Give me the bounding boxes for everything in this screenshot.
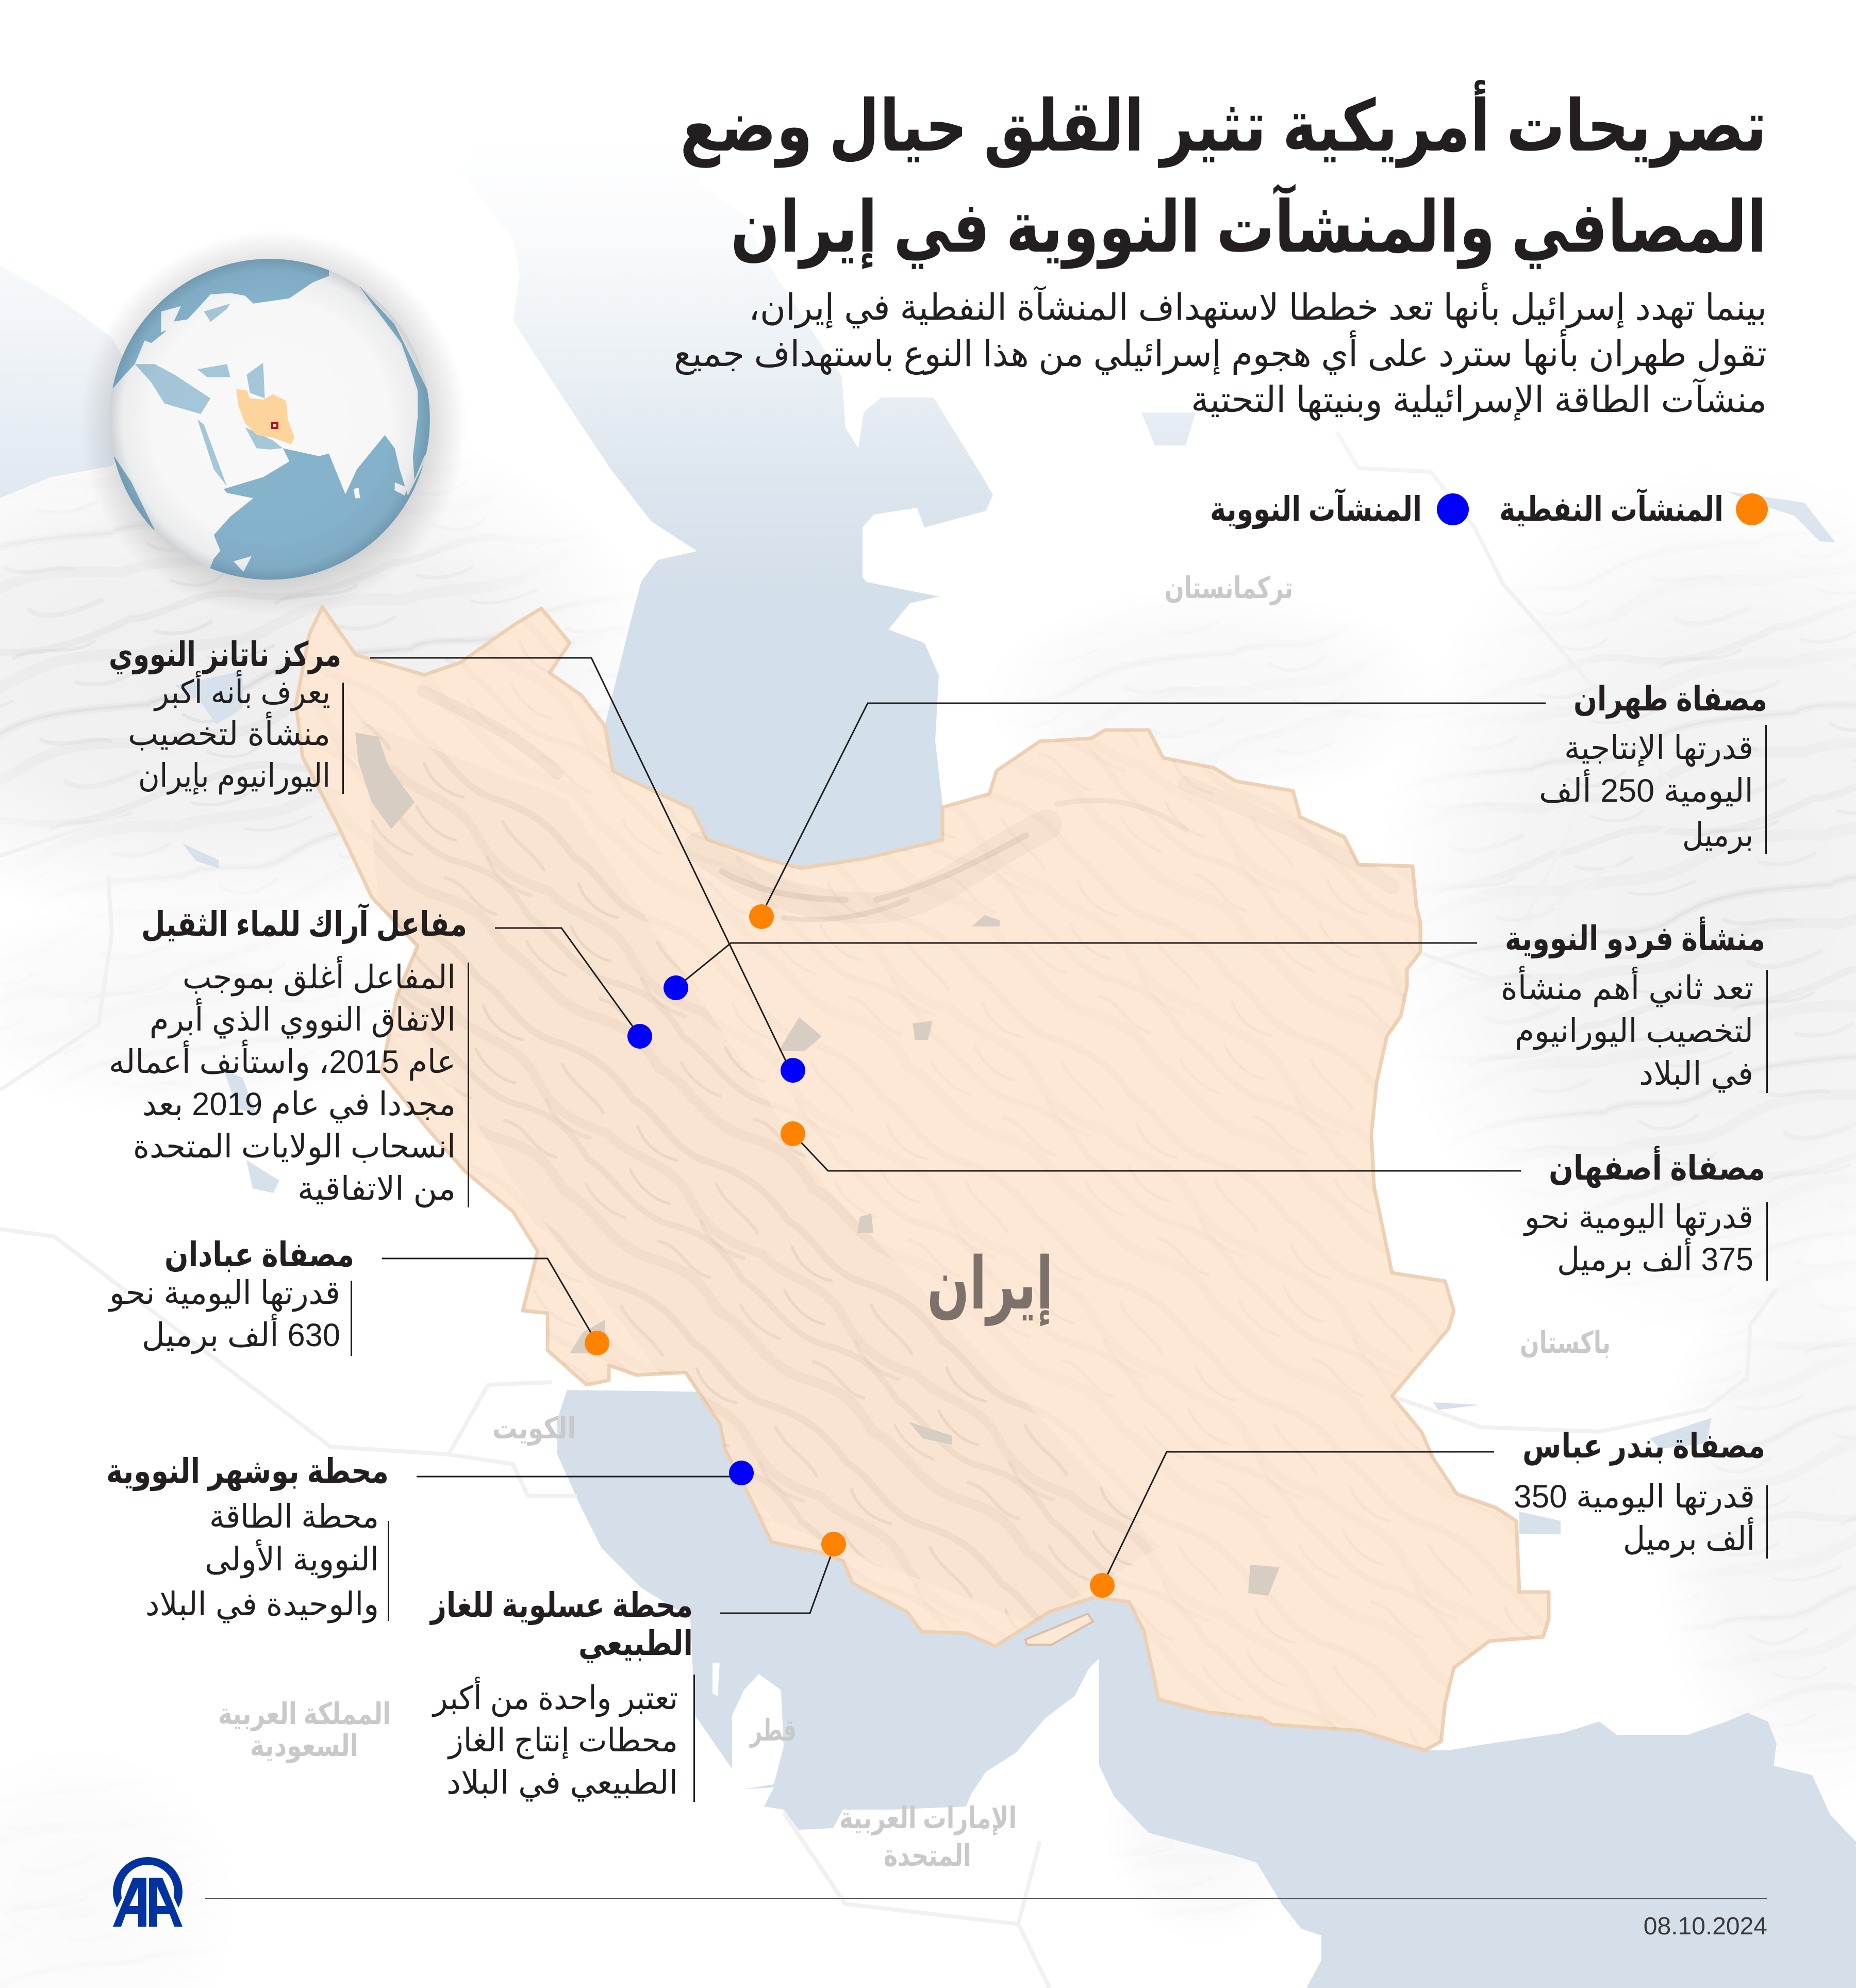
water: Persian Gulf and Sea of Oman bbox=[557, 1390, 1856, 1988]
panel: Asaluyeh: الطبيعي bbox=[578, 1624, 693, 1663]
salt lakes inside Iran bbox=[355, 733, 1280, 1596]
panel: Asaluyeh bbox=[429, 1586, 695, 1802]
subtitle paragraph: بينما تهدد إسرائيل بأنها تعد خططا لاستهداف المنشآة النفطية في إيران، bbox=[749, 283, 1767, 329]
panel: Asaluyeh: محطة عسلوية للغاز bbox=[429, 1586, 693, 1626]
legend bbox=[1210, 488, 1768, 529]
footer rule bbox=[205, 1898, 1767, 1899]
panel: Fordow bbox=[1501, 916, 1768, 1093]
panel: Natanz: مركز ناتانز النووي bbox=[109, 635, 341, 675]
panel: Abadan bbox=[108, 1235, 354, 1356]
panel: Arak: مجددا في عام 2019 بعد bbox=[142, 1086, 456, 1123]
panel: Bushehr: النووية الأولى bbox=[205, 1539, 379, 1579]
relief: Alborz ridge bbox=[423, 691, 1392, 920]
top fade bbox=[0, 0, 1856, 593]
island: Qeshm bbox=[1025, 1614, 1093, 1645]
panel: Tehran refinery: مصفاة طهران bbox=[1573, 680, 1767, 719]
panel: Bushehr: والوحيدة في البلاد bbox=[145, 1586, 379, 1623]
panel: Tehran refinery bbox=[1539, 680, 1767, 854]
panel: Bandar Abbas refinery: قدرتها اليومية 350 bbox=[1514, 1479, 1755, 1516]
title bbox=[680, 80, 1767, 269]
panel: Arak: المفاعل أغلق بموجب bbox=[183, 956, 456, 997]
logo: AA bbox=[113, 1857, 183, 1927]
country labels: قطر bbox=[749, 1714, 797, 1748]
marker: Fordow bbox=[664, 975, 688, 1000]
panel: Bandar Abbas refinery: مصفاة بندر عباس bbox=[1522, 1427, 1765, 1466]
country labels: السعودية bbox=[250, 1729, 358, 1764]
marker: Asaluyeh bbox=[821, 1532, 846, 1556]
land: Qatar and Bahrain bbox=[712, 1663, 784, 1789]
panel: Fordow: تعد ثاني أهم منشأة bbox=[1501, 966, 1753, 1007]
panel: Tehran refinery: برميل bbox=[1682, 817, 1753, 854]
panel: Abadan: 630 ألف برميل bbox=[142, 1314, 340, 1354]
panel: Bushehr: محطة بوشهر النووية bbox=[106, 1452, 389, 1492]
country labels bbox=[218, 571, 1611, 1873]
relief: Zagros band bbox=[399, 872, 1036, 1496]
water: Caspian Sea bbox=[460, 103, 993, 902]
panel: Natanz bbox=[109, 635, 344, 795]
panel: Arak: الاتفاق النووي الذي أبرم bbox=[150, 998, 456, 1039]
map: Iran bbox=[284, 593, 1572, 1758]
subtitle paragraph: تقول طهران بأنها سترد على أي هجوم إسرائيلي من هذا النوع باستهداف جميع bbox=[674, 329, 1767, 375]
date: 08.10.2024 bbox=[1644, 1913, 1767, 1940]
panel: Isfahan refinery bbox=[1523, 1146, 1768, 1281]
legend: oil facilities: المنشآت النفطية bbox=[1499, 488, 1724, 528]
marker: Arak bbox=[627, 1024, 652, 1049]
panel: Abadan: قدرتها اليومية نحو bbox=[108, 1275, 340, 1312]
marker: Natanz bbox=[781, 1058, 805, 1083]
marker: Abadan refinery bbox=[585, 1331, 609, 1355]
panel: Tehran refinery: قدرتها الإنتاجية bbox=[1564, 730, 1753, 767]
water: Black Sea bbox=[0, 265, 155, 498]
panel: Fordow: لتخصيب اليورانيوم bbox=[1515, 1013, 1753, 1050]
panel: Arak: مفاعل آراك للماء الثقيل bbox=[141, 903, 467, 944]
country labels: تركمانستان bbox=[1165, 571, 1293, 606]
panel: Isfahan refinery: مصفاة أصفهان bbox=[1549, 1146, 1765, 1188]
panel: Isfahan refinery: 375 ألف برميل bbox=[1557, 1238, 1753, 1279]
panel: Natanz: اليورانيوم بإيران bbox=[138, 758, 330, 795]
panel: Arak: من الاتفاقية bbox=[297, 1171, 456, 1208]
panel: Asaluyeh: تعتبر واحدة من أكبر bbox=[432, 1677, 678, 1717]
country labels: المتحدة bbox=[884, 1839, 971, 1873]
panel: Abadan: مصفاة عبادان bbox=[164, 1235, 354, 1273]
country labels: الكويت bbox=[492, 1412, 576, 1446]
country borders bbox=[0, 432, 1777, 1988]
marker: Isfahan refinery bbox=[781, 1121, 805, 1146]
country labels: الإمارات العربية bbox=[839, 1801, 1017, 1836]
panel: Tehran refinery: اليومية 250 ألف bbox=[1539, 769, 1753, 810]
subtitle paragraph bbox=[674, 283, 1767, 421]
panel: Bushehr: محطة الطاقة bbox=[209, 1499, 379, 1535]
panel: Isfahan refinery: قدرتها اليومية نحو bbox=[1523, 1199, 1753, 1236]
panel: Fordow: في البلاد bbox=[1639, 1056, 1753, 1093]
country labels: المملكة العربية bbox=[218, 1697, 391, 1732]
marker: Bushehr bbox=[729, 1461, 754, 1485]
panel: Asaluyeh: محطات إنتاج الغاز bbox=[447, 1722, 678, 1760]
panel: Natanz: منشأة لتخصيب bbox=[128, 711, 330, 752]
leader lines bbox=[370, 658, 1546, 1613]
globe: location marker bbox=[272, 423, 277, 428]
lakes bbox=[174, 412, 1835, 1534]
panel: Bandar Abbas refinery: ألف برميل bbox=[1623, 1517, 1755, 1558]
panel: Arak: عام 2015، واستأنف أعماله bbox=[109, 1039, 456, 1081]
country labels: باكستان bbox=[1520, 1326, 1611, 1360]
panel: Fordow: منشأة فردو النووية bbox=[1505, 916, 1765, 959]
label: Iran: إيران bbox=[927, 1243, 1053, 1327]
marker: Bandar Abbas refinery bbox=[1090, 1573, 1115, 1598]
panel: Asaluyeh: الطبيعي في البلاد bbox=[446, 1765, 678, 1802]
panel: Arak bbox=[109, 903, 469, 1208]
panel: Natanz: يعرف بأنه أكبر bbox=[153, 670, 330, 711]
panel: Bandar Abbas refinery bbox=[1514, 1427, 1768, 1559]
marker: Tehran refinery bbox=[749, 904, 774, 929]
panel: Arak: انسحاب الولايات المتحدة bbox=[133, 1129, 456, 1166]
panel: Bushehr bbox=[106, 1452, 389, 1623]
legend: nuclear facilities: المنشآت النووية bbox=[1210, 488, 1422, 529]
facility markers bbox=[585, 904, 1115, 1598]
globe bbox=[80, 230, 467, 617]
subtitle paragraph: منشآت الطاقة الإسرائيلية وبنيتها التحتية bbox=[1191, 378, 1767, 421]
